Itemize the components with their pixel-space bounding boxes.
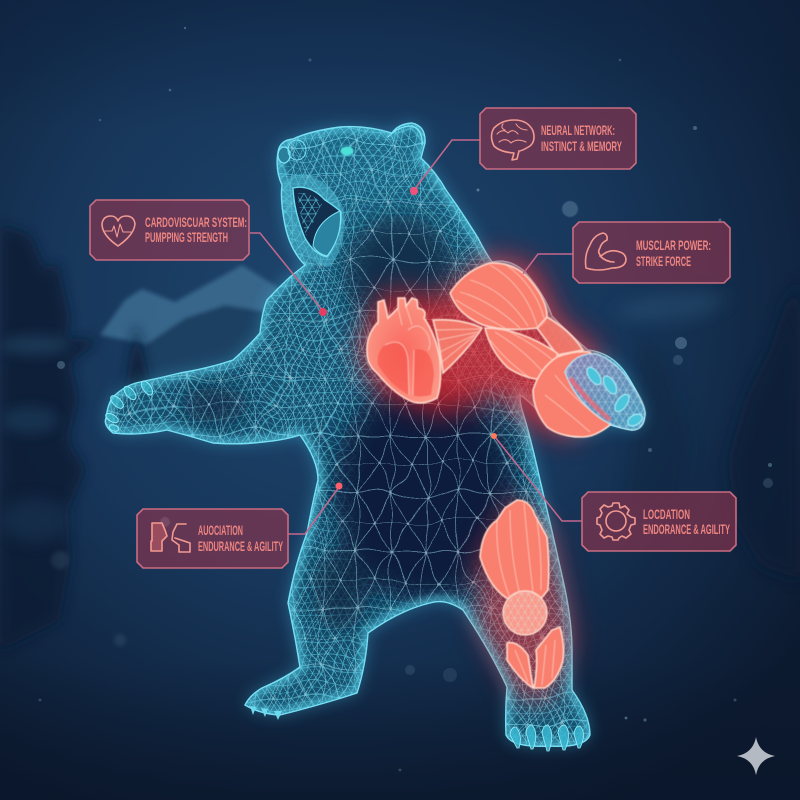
pectoral muscle xyxy=(433,320,482,373)
upper arm muscles xyxy=(485,317,583,380)
open mouth xyxy=(284,174,345,267)
text: muscular power: MUSCLAR POWER: xyxy=(636,237,711,253)
forearm and paw xyxy=(533,352,645,437)
icon: flexed arm xyxy=(586,233,626,270)
panel: muscular power: STRIKE FORCE xyxy=(636,253,691,269)
nose and eye xyxy=(278,126,422,163)
leader line: association xyxy=(288,482,342,534)
red glow behind organs xyxy=(358,255,600,700)
left paw toes xyxy=(104,379,155,433)
right foot toes and claws xyxy=(510,725,584,751)
pine trees xyxy=(0,225,156,650)
leader line: location xyxy=(491,433,582,521)
panel: association xyxy=(137,509,288,568)
text: neural network: NEURAL NETWORK: xyxy=(541,122,615,138)
icon: sparkle watermark xyxy=(737,737,775,775)
icon: heart xyxy=(102,216,135,246)
bear wireframe body xyxy=(99,117,652,755)
organs xyxy=(367,263,645,688)
leader line: neural network xyxy=(410,140,481,195)
calf muscle xyxy=(507,627,564,688)
panel: location xyxy=(582,492,736,551)
text: association: AUOCIATION xyxy=(198,522,243,538)
icon: brain xyxy=(492,120,534,160)
leader line: cardiovascular xyxy=(250,233,327,316)
panel: association: ENDURANCE & AGILITY xyxy=(198,538,283,554)
shoulder muscle xyxy=(450,263,547,329)
thigh muscle xyxy=(480,500,549,600)
panel: cardiovascular system xyxy=(90,200,249,260)
mountains xyxy=(100,265,300,420)
knee xyxy=(503,591,547,635)
text: location: LOCDATION xyxy=(643,506,690,522)
panel: cardiovascular system: PUMPPING STRENGTH xyxy=(145,229,228,245)
panel: muscular power xyxy=(573,222,730,283)
leader line: muscular power xyxy=(523,254,574,274)
heart xyxy=(367,298,441,403)
text: cardiovascular: CARDOVISCUAR SYSTEM: xyxy=(145,214,247,230)
icon: gear xyxy=(597,503,635,540)
left foot claws xyxy=(250,706,282,720)
panel: neural network: INSTINCT & MEMORY xyxy=(541,138,622,154)
icon: joint xyxy=(151,523,190,552)
panel: neural network xyxy=(480,108,636,169)
